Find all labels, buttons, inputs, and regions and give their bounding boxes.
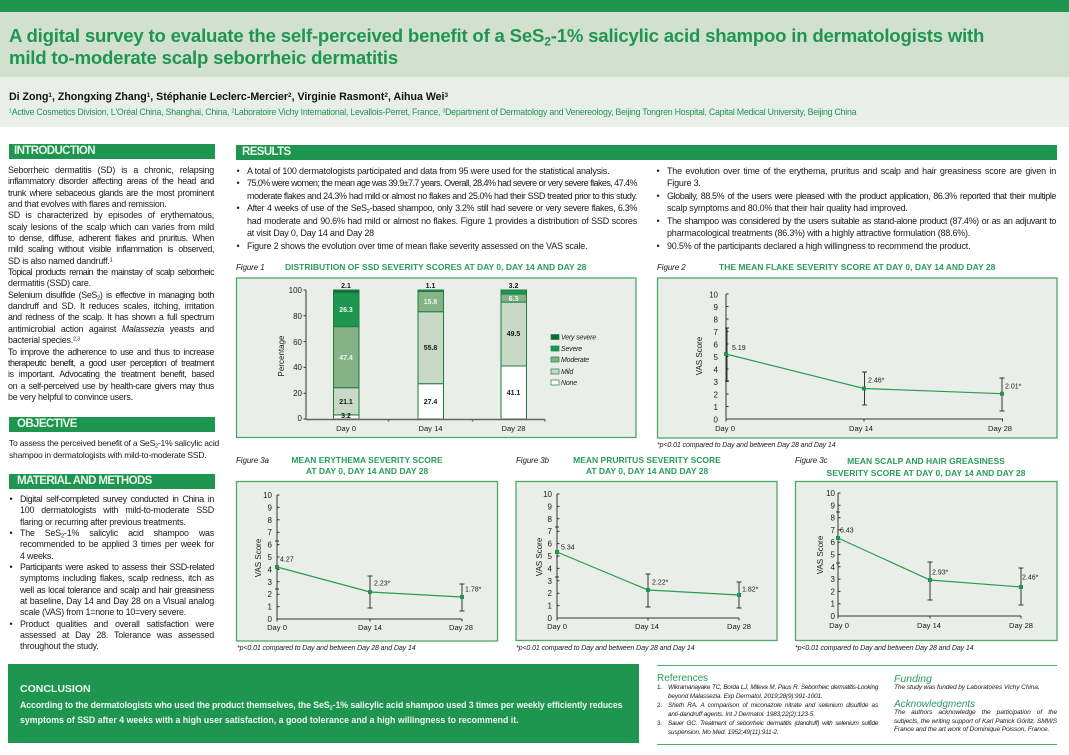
text block: results right column: 90.5% of the participants declared a high willingness to recommend the product. <box>667 241 970 251</box>
bar value labels: 15.8 <box>424 299 437 306</box>
legend: None <box>561 380 577 387</box>
data labels: 5.19 <box>732 345 746 352</box>
text block: results right column: Figure 3. <box>667 178 701 188</box>
figure 1 title: DISTRIBUTION OF SSD SEVERITY SCORES AT DAY 0, DAY 14 AND DAY 28 <box>285 262 586 272</box>
acknowledgments text: subjects, the writing support of Karl Patrick Göritz, SMWS <box>894 718 1057 724</box>
text block: introduction: To improve the adherence to use and thus to increase <box>8 346 214 356</box>
bar value labels: 27.4 <box>424 399 437 406</box>
figure 3a title: MEAN ERYTHEMA SEVERITY SCORE <box>291 455 443 465</box>
bar: day 14 <box>418 290 444 419</box>
figure 3b title: AT DAY 0, DAY 14 AND DAY 28 <box>586 466 708 476</box>
text block: results left column <box>236 166 638 251</box>
text block: material and methods: assessed at Day 28. Tolerance was assessed <box>20 630 214 640</box>
panel: figure 1 stacked bar chart: 0 <box>298 414 303 423</box>
figure 3a label: Figure 3a <box>236 456 269 464</box>
panel: figure 2 line chart: 0 <box>714 416 719 424</box>
axes <box>726 294 1003 422</box>
panel: figure 3c line chart <box>796 482 1057 640</box>
panel: figure 3a line chart <box>236 482 498 641</box>
divider: footer top <box>657 665 1057 666</box>
panel: figure 2 line chart: 6 <box>714 340 719 350</box>
x axis labels <box>336 424 526 433</box>
panel: figure 3c line chart: 10 <box>826 489 836 498</box>
references list: Wikramanayake TC, Borda LJ, Miteva M, Paus R. Seborrheic dermatitis-Looking <box>668 684 878 691</box>
acknowledgments heading: Acknowledgments <box>894 699 975 710</box>
data labels: 2.01* <box>1005 384 1022 390</box>
panel: figure 3a line chart: 2.23* <box>374 580 391 588</box>
panel: figure 3b line chart: 9 <box>548 502 553 511</box>
panel: figure 3a line chart: Day 14 <box>358 623 382 632</box>
panel: figure 1 stacked bar chart: 60 <box>293 338 303 347</box>
title: A digital survey to evaluate the self-perceived benefit of a SeS2-1% salicylic acid shampoo in dermatologists with <box>9 24 984 48</box>
panel: figure 2 line chart: 4 <box>714 366 719 374</box>
panel: figure 3a line chart: Day 0 <box>267 623 287 632</box>
panel: figure 3b line chart: 8 <box>548 515 553 524</box>
heading: objective <box>9 417 215 432</box>
text block: results right column: scalp symptoms and 80.0% that their hair quality had improved. <box>667 203 908 213</box>
panel: figure 3a line chart: 10 <box>263 491 273 500</box>
panel: figure 3b line chart: VAS Score <box>535 537 544 576</box>
references list: Sauer GC. Treatment of seborrheic dermatitis (dandruff) with selenium sulfide <box>668 720 878 727</box>
title: mild to-moderate scalp seborrheic dermatitis <box>9 47 398 68</box>
conclusion heading: CONCLUSION <box>20 683 91 695</box>
text block: results left column: After 4 weeks of use of the SeS2-based shampoo, only 3.2% still had severe or very severe flakes, 6.3% <box>247 203 637 215</box>
panel: figure 3b line chart: 5.34 <box>561 544 575 552</box>
title <box>9 24 984 68</box>
heading: objective: OBJECTIVE <box>17 418 77 430</box>
panel: figure 2 line chart: 10 <box>709 290 719 300</box>
bar value labels: 49.5 <box>507 331 520 338</box>
references list <box>657 684 878 736</box>
references list: suspension. Mo Med. 1952;49(11):911-2. <box>668 729 779 736</box>
panel: figure 3b line chart: Day 28 <box>727 622 751 631</box>
panel: figure 1 stacked bar chart: 20 <box>293 389 303 398</box>
panel: figure 3b line chart: Day 14 <box>635 622 659 631</box>
bars <box>334 290 526 419</box>
x axis labels: Day 14 <box>418 424 443 433</box>
panel: figure 3c line chart: 6 <box>831 538 836 547</box>
panel: figure 3c line chart: 5 <box>831 550 836 560</box>
text block: introduction: Topical products remain the mainstay of scalp seborrheic <box>8 267 214 277</box>
panel: figure 3b line chart: 3 <box>548 577 553 586</box>
text block: introduction: and that evolves with flares and remission. <box>8 199 167 209</box>
panel: figure 3a line chart: 1.78* <box>465 586 482 594</box>
legend: Moderate <box>561 357 589 364</box>
panel: figure 3a line chart: Day 28 <box>449 623 473 632</box>
text block: introduction: is important. Advocating the treatment benefit, based <box>8 369 214 379</box>
panel: figure 3a line chart: 9 <box>268 504 273 512</box>
acknowledgments text: France and the art work of Dominique Poisson, France. <box>894 726 1049 733</box>
text block: objective <box>9 438 219 460</box>
panel: figure 3c line chart: Day 0 <box>829 621 849 630</box>
panel: figure 3c line chart: 6.43 <box>840 528 854 534</box>
conclusion text: According to the dermatologists who used the product themselves, the SeS2-1% salicylic acid shampoo used 3 times per weekly efficiently reduces <box>20 700 622 712</box>
text block: introduction: bacterial species.2,3 <box>8 335 80 345</box>
panel: figure 3c line chart: Day 28 <box>1009 621 1033 630</box>
legend: Mild <box>561 369 574 376</box>
bar value labels: 2.1 <box>341 283 351 290</box>
panel: figure 3b line chart: 2.22* <box>652 580 669 586</box>
text block: introduction: be very helpful to convince users. <box>8 392 133 402</box>
text block: material and methods: flaring or recurring after previous treatments. <box>20 517 186 527</box>
figure 2 title: THE MEAN FLAKE SEVERITY SCORE AT DAY 0, DAY 14 AND DAY 28 <box>719 262 995 272</box>
y axis with ticks <box>304 290 306 419</box>
text block: material and methods <box>10 494 214 651</box>
panel: figure 2 line chart: VAS Score <box>695 336 704 375</box>
bar value labels: 47.4 <box>339 355 353 362</box>
heading: material and methods: MATERIAL AND METHODS <box>17 475 152 487</box>
text block: material and methods: Participants were asked to assess their SSD-related <box>20 562 214 572</box>
references list: beyond Malassezia. Exp Dermatol. 2019;28(9):991-1001. <box>668 693 823 700</box>
figure 3c title: SEVERITY SCORE AT DAY 0, DAY 14 AND DAY 28 <box>827 468 1025 478</box>
text block: introduction: mild scaling without visible inflammation is observed, <box>8 244 214 254</box>
text block: objective: To assess the perceived benefit of a SeS2-1% salicylic acid <box>9 438 219 450</box>
heading: results <box>236 145 1057 160</box>
references list: anti-dandruff agents. Int J Dermatol. 1983;22(2):123-5. <box>668 711 815 718</box>
error bars <box>725 328 1004 411</box>
header: top green band <box>0 0 1069 12</box>
panel: conclusion <box>8 664 639 743</box>
figure 3b footnote: *p<0.01 compared to Day and between Day 28 and Day 14 <box>516 644 695 652</box>
panel: figure 2 line chart: Day 28 <box>988 424 1012 433</box>
panel: figure 3c line chart: 2 <box>831 587 836 596</box>
text block: results left column: had moderate and 90.6% had mild or almost no flakes. Figure 1 provides a distribution of SSD scores <box>247 216 637 226</box>
text block: results left column: 75.0% were women; the mean age was 39.9±7.7 years. Overall, 28.4% had severe or very severe flakes, 47.4% <box>247 178 637 188</box>
text block: introduction: dermatitis (SSD) care. <box>8 278 91 288</box>
funding heading: Funding <box>894 673 932 685</box>
text block: material and methods: throughout the study. <box>20 641 99 651</box>
text block: introduction: therapeutic benefit, a good user perception of treatment <box>8 358 214 368</box>
text block: material and methods: recommended to be applied 3 times per week for <box>20 539 214 549</box>
panel: figure 3b line chart: Day 0 <box>547 622 567 631</box>
text block: introduction: inflammatory disorder affecting areas of the head and <box>8 176 214 186</box>
text block: results left column: moderate flakes and 24.3% had mild or almost no flakes and 25.0% had their SSD treated prior to this study. <box>247 191 637 201</box>
panel: figure 3a line chart: VAS Score <box>254 538 263 577</box>
data labels <box>732 345 1022 390</box>
panel: figure 3c line chart: VAS Score <box>816 535 825 574</box>
text block: introduction: and redness of the scalp. It has shown a full spectrum <box>8 312 214 322</box>
text: 3. <box>657 720 662 727</box>
panel: figure 2 line chart: 8 <box>714 316 719 324</box>
bar: day 28 <box>501 290 526 419</box>
panel: figure 3a line chart: 6 <box>268 541 273 550</box>
panel: figure 3a line chart: 7 <box>268 528 273 537</box>
x axis <box>306 420 545 422</box>
conclusion text <box>20 700 622 725</box>
figure 1 label: Figure 1 <box>236 262 265 272</box>
bar: day 0 <box>334 290 359 419</box>
panel: figure 3c line chart: 2.93* <box>932 570 949 576</box>
text: 2. <box>657 702 662 709</box>
text block: material and methods: The SeS2-1% salicylic acid shampoo was <box>20 528 214 540</box>
panel: figure 3a line chart: 1 <box>268 603 273 612</box>
figure 3c title: MEAN SCALP AND HAIR GREASINESS <box>847 456 1005 466</box>
data points <box>724 352 1004 396</box>
bar value labels: 6.3 <box>509 296 518 303</box>
heading: introduction: INTRODUCTION <box>14 145 95 157</box>
references heading: References <box>657 673 708 684</box>
panel: figure 3c line chart: 7 <box>831 526 836 535</box>
panel: figure 2 line chart: 2 <box>714 390 719 400</box>
panel: figure 3b line chart: 6 <box>548 540 553 549</box>
text block: introduction <box>8 165 214 402</box>
panel: figure 1 stacked bar chart <box>236 278 636 438</box>
text block: results left column: at visit Day 0, Day 14 and Day 28 <box>247 228 374 238</box>
panel: figure 2 line chart: 1 <box>714 403 719 412</box>
authors: Di Zong1, Zhongxing Zhang1, Stéphanie Leclerc-Mercier2, Virginie Rasmont2, Aihua Wei3 <box>9 91 448 103</box>
divider: footer bottom <box>657 744 1057 745</box>
text block: objective: shampoo in dermatologists with mild-to-moderate SSD. <box>9 450 206 460</box>
text block: introduction: Seborrheic dermatitis (SD) is a chronic, relapsing <box>8 165 214 175</box>
panel: figure 2 line chart: 3 <box>714 378 719 387</box>
x axis labels: Day 0 <box>336 424 356 433</box>
panel: figure 3b line chart: 4 <box>548 564 553 573</box>
figure 3b title: MEAN PRURITUS SEVERITY SCORE <box>573 455 721 465</box>
panel: figure 3a line chart: 2 <box>268 590 273 599</box>
panel: figure 3a line chart: 4 <box>268 565 273 574</box>
figure 3c label: Figure 3c <box>795 456 827 464</box>
legend: Very severe <box>561 334 596 342</box>
panel: figure 3b line chart: 1.82* <box>742 586 759 594</box>
data labels: 2.46* <box>868 378 885 384</box>
panel: figure 1 stacked bar chart: 100 <box>289 286 303 295</box>
panel: figure 3c line chart: 0 <box>831 612 836 621</box>
acknowledgments text <box>894 709 1057 733</box>
text block: results right column: The evolution over time of the erythema, pruritus and scalp and hair greasiness score are given in <box>667 166 1056 176</box>
panel: figure 2 line chart: 5 <box>714 353 719 362</box>
references list: Sheth RA. A comparison of miconazole nitrate and selenium disulfide as <box>668 702 878 709</box>
funding text: The study was funded by Laboratoires Vichy China. <box>894 684 1040 691</box>
panel: figure 3c line chart: Day 14 <box>917 621 941 630</box>
panel: figure 3c line chart: 4 <box>831 563 836 572</box>
acknowledgments text: The authors acknowledge the participation of the <box>894 709 1057 716</box>
bar value labels: 3.2 <box>341 413 351 420</box>
figure 3a title <box>291 455 443 476</box>
panel: figure 1 stacked bar chart: 80 <box>293 312 303 321</box>
text block: material and methods: Product qualities and overall satisfaction were <box>20 619 214 629</box>
text block: material and methods: symptoms including flakes, scalp redness, itch as <box>20 573 214 583</box>
panel: figure 1 stacked bar chart: 40 <box>293 363 303 372</box>
y axis title: Percentage <box>277 335 286 376</box>
figure 2 footnote: *p<0.01 compared to Day and between Day 28 and Day 14 <box>657 440 836 448</box>
figure 3a title: AT DAY 0, DAY 14 AND DAY 28 <box>306 466 428 476</box>
bar value labels: 1.1 <box>426 283 435 290</box>
bar value labels: 21.1 <box>339 399 353 406</box>
text block: material and methods: at baseline, Day 14 and Day 28 on a Visual analog <box>20 596 214 606</box>
header: authors band <box>0 77 1069 127</box>
bar value labels: 55.8 <box>424 345 437 352</box>
bar value labels: 3.2 <box>509 283 518 290</box>
panel: figure 3a line chart: 4.27 <box>280 556 294 564</box>
bar value labels: 26.3 <box>339 307 353 314</box>
panel: figure 3c line chart: 8 <box>831 514 836 523</box>
panel: figure 3a line chart: 8 <box>268 516 273 525</box>
figure 3b title <box>573 455 721 476</box>
text block: introduction: dandruff and SD. It reduces scales, itching, irritation <box>8 301 214 311</box>
panel: figure 3b line chart: 1 <box>548 602 553 611</box>
text block: results right column: pharmacological treatments (86.3%) with a highly attractive formulation (88.6%). <box>667 228 970 238</box>
text: 1. <box>657 684 662 691</box>
panel: figure 3b line chart: 0 <box>548 614 553 623</box>
bar value labels <box>339 283 520 420</box>
legend <box>551 334 596 387</box>
panel: figure 3a line chart: 5 <box>268 553 273 562</box>
panel: figure 3c line chart: 1 <box>831 600 836 609</box>
header: title band <box>0 12 1069 77</box>
affiliations: 1Active Cosmetics Division, L'Oréal China, Shanghai, China, 2Laboratoire Vichy International, Levallois-Perret, France, 3Department of Dermatology and Venereology, Beijing Tongren Hospital, Capital Medical University, Beijing China <box>9 107 856 117</box>
panel: figure 3b line chart: 2 <box>548 589 553 598</box>
text block: introduction: scaly lesions of the scalp which can varies from mild <box>8 222 214 232</box>
text block: results left column: A total of 100 dermatologists participated and data from 95 were used for the statistical analysis. <box>247 166 609 176</box>
panel: figure 3b line chart: 7 <box>548 527 553 536</box>
text block: material and methods: 4 weeks. <box>20 551 53 561</box>
text block: results left column: Figure 2 shows the evolution over time of mean flake severity assessed on the VAS scale. <box>247 241 587 251</box>
panel: figure 2 line chart: 9 <box>714 303 719 312</box>
text block: introduction: SD is characterized by episodes of erythematous, <box>8 210 214 220</box>
panel: figure 2 line chart: Day 0 <box>715 424 735 433</box>
figure 3a footnote: *p<0.01 compared to Day and between Day 28 and Day 14 <box>237 644 416 652</box>
heading: material and methods <box>9 474 215 489</box>
bar value labels: 41.1 <box>507 390 520 397</box>
x axis labels: Day 28 <box>501 424 526 433</box>
legend: Severe <box>561 346 582 353</box>
panel: figure 2 line chart: Day 14 <box>849 424 873 433</box>
text block: material and methods: Digital self-completed survey conducted in China in <box>20 494 214 504</box>
panel: figure 3b line chart: 10 <box>543 490 553 499</box>
panel: figure 3c line chart: 9 <box>831 501 836 510</box>
figure 3c title <box>826 456 1026 478</box>
text block: introduction: on a self-perceived use by health-care givers may thus <box>8 381 214 391</box>
text block: results right column: Globally, 88.5% of the users were pleased with the product application, 86.3% reported that their multiple <box>667 191 1056 201</box>
text block: material and methods: 100 dermatologists with mild-to-moderate SSD <box>20 505 214 515</box>
heading: results: RESULTS <box>242 146 291 158</box>
panel: figure 3b line chart <box>516 482 777 640</box>
text block: material and methods: well as local tolerance and scalp and hair greasiness <box>20 585 214 595</box>
panel: figure 3c line chart: 2.46* <box>1022 574 1039 582</box>
text block: results right column: The shampoo was considered by the users suitable as stand-alone product (87.4%) or as an adjuvant to <box>667 216 1056 226</box>
panel: figure 3b line chart: 5 <box>548 552 553 561</box>
panel: figure 3c line chart: 3 <box>831 575 836 584</box>
panel: figure 2 line chart: 7 <box>714 328 719 337</box>
text block: introduction: SD is also named dandruff.1 <box>8 256 112 266</box>
text block: introduction: Selenium disulfide (SeS2) is effective in managing both <box>8 290 214 302</box>
text block: results right column <box>656 166 1056 251</box>
text block: introduction: antimicrobial action against Malassezia yeasts and <box>8 324 214 334</box>
data line <box>726 354 1002 394</box>
figure 3c footnote: *p<0.01 compared to Day and between Day 28 and Day 14 <box>795 644 974 652</box>
heading: introduction <box>9 144 215 159</box>
panel: figure 3a line chart: 0 <box>268 615 273 624</box>
panel: figure 2 line chart <box>658 278 1057 438</box>
text block: introduction: trunk where sebaceous glands are the most prominent <box>8 188 214 198</box>
panel: figure 3a line chart: 3 <box>268 578 273 587</box>
text block: introduction: to dense, diffuse, adherent flakes and pruritus. When <box>8 233 214 243</box>
text block: material and methods: scale (VAS) from 1=none to 10=very severe. <box>20 607 186 617</box>
conclusion text: symptoms of SSD after 4 weeks with a high user satisfaction, a good tolerance and a high willingness to recommend it. <box>20 715 519 725</box>
figure 3b label: Figure 3b <box>516 456 549 464</box>
figure 2 label: Figure 2 <box>657 262 686 272</box>
